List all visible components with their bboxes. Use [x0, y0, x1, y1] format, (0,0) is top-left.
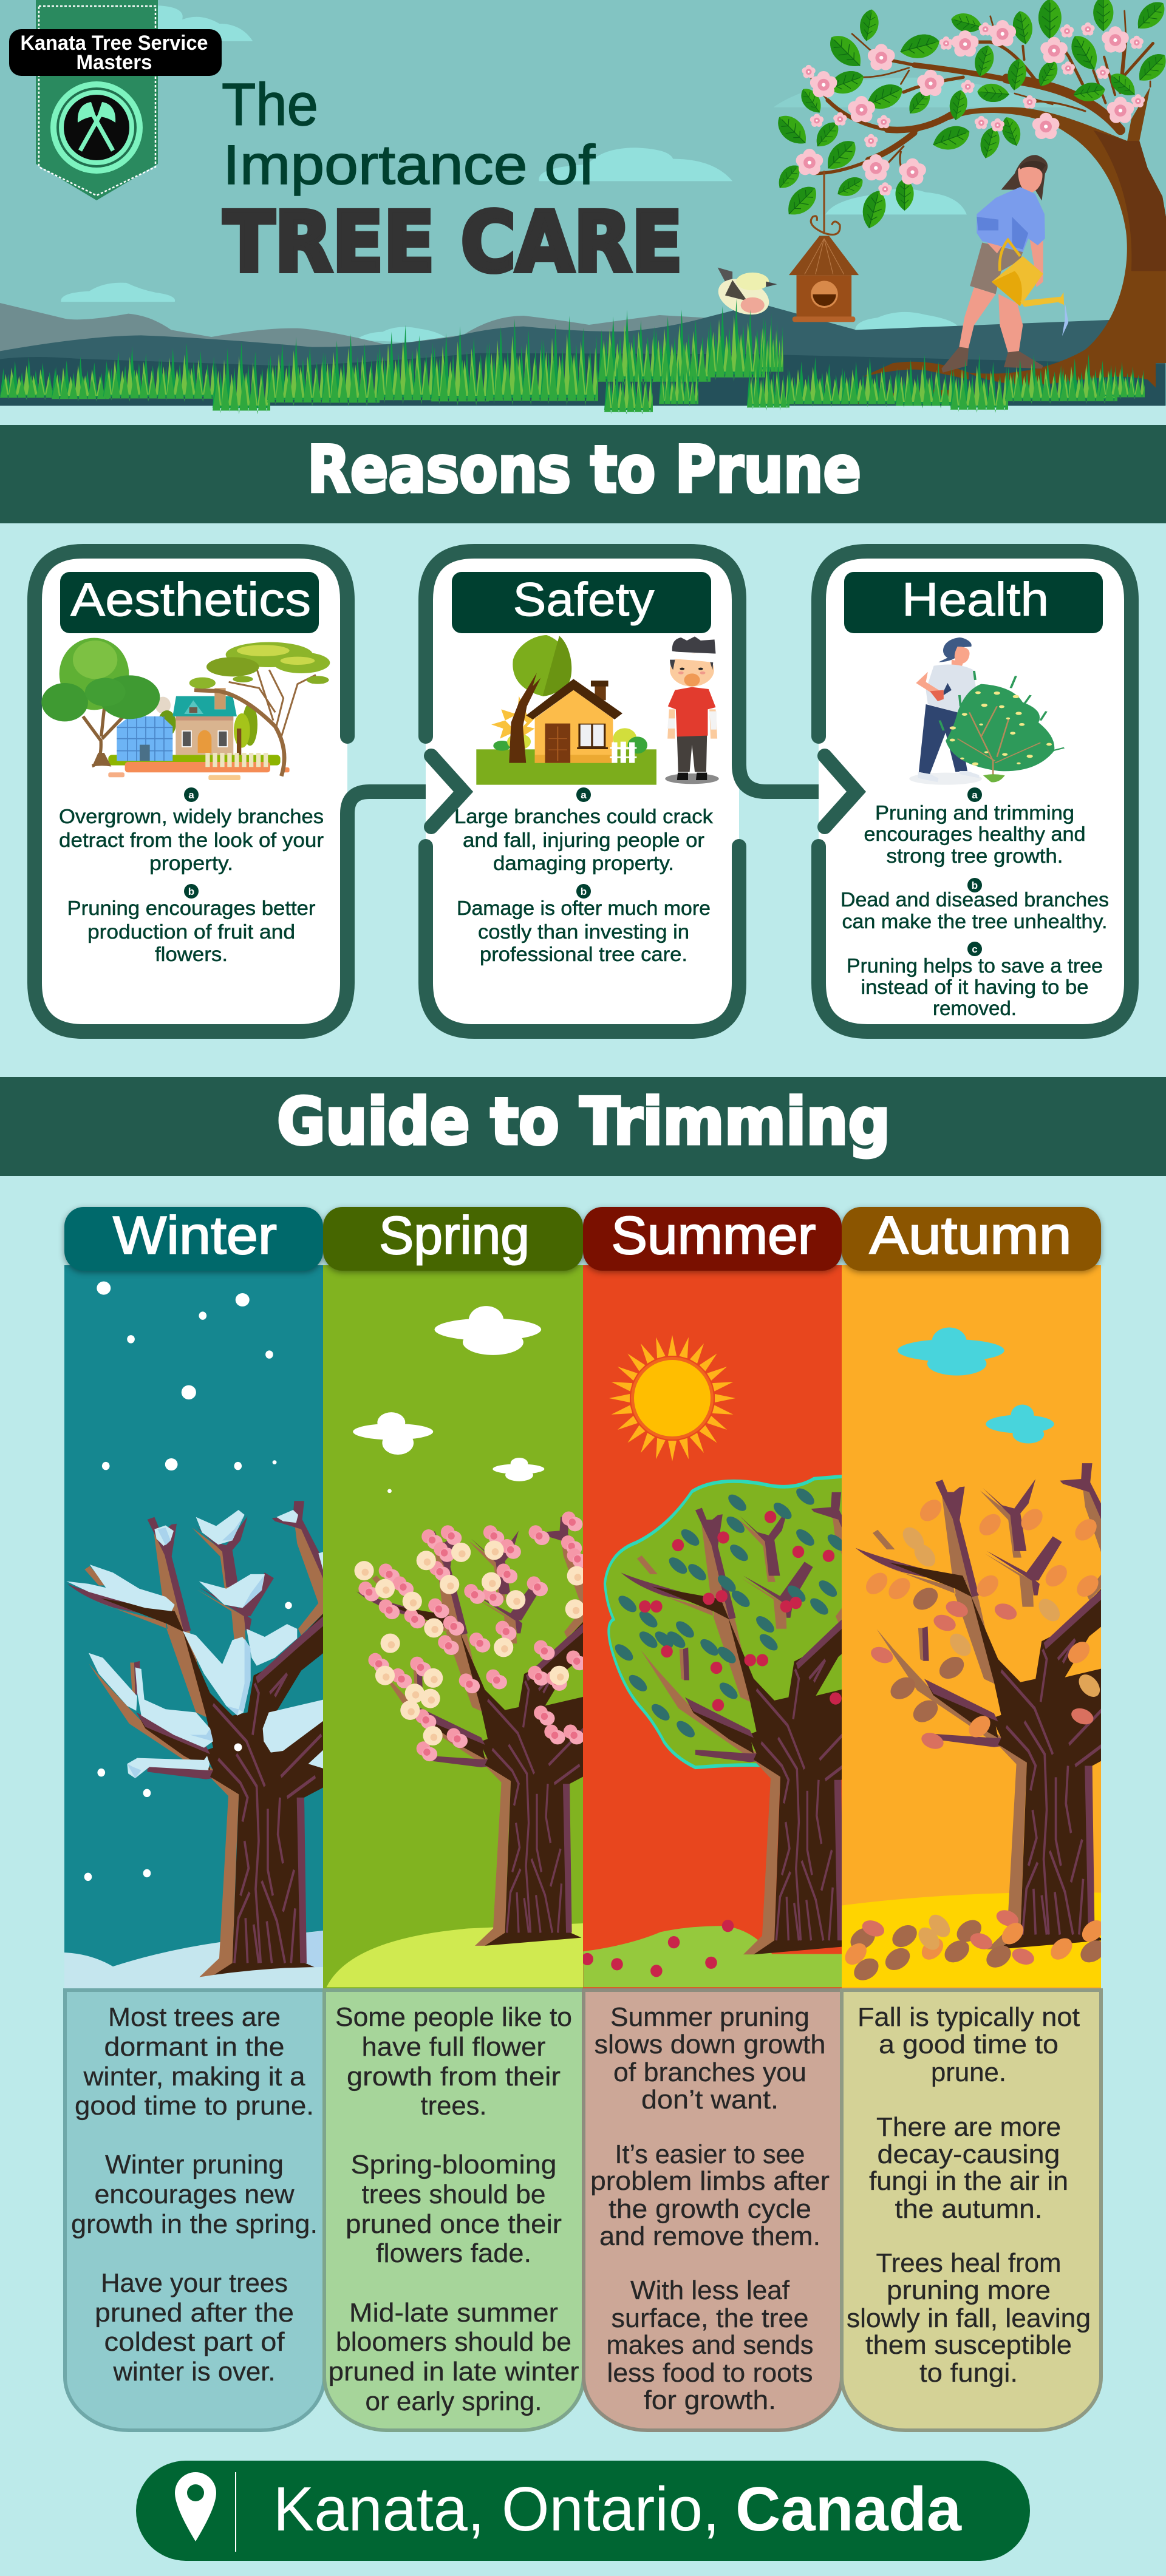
heading: Aesthetics: Aesthetics	[70, 573, 311, 626]
winter tree	[67, 1501, 326, 1977]
text panel: winter	[65, 1990, 324, 2430]
header hero illustration	[0, 0, 1166, 415]
section bar: Reasons to Prune: Reasons to Prune	[307, 432, 861, 507]
text panel: autumn: Trees heal from	[876, 2248, 1062, 2278]
bird	[718, 267, 777, 314]
text panel: summer: the growth cycle	[609, 2194, 811, 2224]
text panel: autumn: a good time to	[879, 2030, 1059, 2059]
text block: encourages healthy and	[864, 823, 1086, 845]
bullet b	[184, 884, 199, 899]
text panel: summer: makes and sends	[606, 2330, 814, 2360]
falling and fallen leaves	[843, 1496, 1106, 1984]
text panel: spring: bloomers should be	[336, 2327, 571, 2357]
clouds and ground	[842, 1327, 1101, 1987]
text panel: spring: trees.	[420, 2091, 487, 2121]
text panel: autumn: Fall is typically not	[857, 2002, 1080, 2032]
text block	[840, 888, 1109, 933]
text panel: summer: Summer pruning	[610, 2002, 810, 2032]
text panel: summer: slows down growth	[594, 2030, 826, 2059]
summer tree	[621, 1492, 861, 1954]
text panel: autumn: decay-causing	[877, 2139, 1060, 2169]
illustration: house and trees	[41, 638, 330, 780]
sun	[609, 1335, 735, 1461]
text block: can make the tree unhealthy.	[842, 910, 1108, 933]
bullet b: b	[972, 880, 978, 891]
location text: Kanata, Ontario,	[273, 2474, 720, 2544]
text block: and fall, injuring people or	[463, 829, 704, 851]
bullet a: a	[972, 789, 978, 801]
text block: detract from the look of your	[59, 829, 324, 851]
company name label: Masters	[77, 51, 152, 74]
panel: Health	[819, 551, 1131, 1031]
company name label: Kanata Tree Service	[21, 32, 208, 55]
arrow: safety to health	[825, 756, 856, 827]
header: Spring: Spring	[379, 1205, 530, 1265]
text panel: spring: flowers fade.	[376, 2238, 531, 2268]
text panel: summer: don’t want.	[641, 2085, 779, 2115]
section bar: Guide to Trimming: Guide to Trimming	[277, 1084, 890, 1159]
text panel: autumn: There are more	[876, 2112, 1061, 2142]
text block: Large branches could crack	[454, 805, 714, 828]
title	[222, 71, 683, 291]
panel: Safety	[426, 551, 856, 1031]
text panel: winter: Most trees are	[108, 2002, 281, 2032]
text panel: summer: of branches you	[613, 2058, 806, 2087]
text panel: autumn: slowly in fall, leaving	[847, 2303, 1091, 2333]
heading: Health	[844, 572, 1103, 633]
panel: spring scene	[323, 1265, 589, 1988]
text panel: summer: for growth.	[644, 2385, 776, 2415]
text panel: autumn: prune.	[931, 2058, 1006, 2087]
text panel: winter: dormant in the	[104, 2032, 284, 2062]
text panel: spring: or early spring.	[366, 2387, 542, 2416]
location text bold: Canada	[735, 2474, 962, 2544]
text block: costly than investing in	[478, 920, 689, 943]
text block	[59, 805, 324, 874]
text panel: winter: winter is over.	[113, 2357, 275, 2387]
text panel: winter: Have your trees	[101, 2268, 288, 2298]
text panel: autumn: the autumn.	[895, 2194, 1042, 2224]
text block: production of fruit and	[87, 920, 295, 943]
illustration: fallen tree on house and injured man	[476, 635, 719, 785]
title: TREE CARE	[223, 195, 683, 291]
text block	[454, 805, 714, 874]
heading: Safety: Safety	[513, 573, 655, 626]
illustration: woman pruning a bush	[909, 637, 1064, 785]
front snow	[199, 1967, 323, 1979]
text panel: spring: Some people like to	[335, 2002, 572, 2032]
bullet a	[576, 787, 591, 802]
bullet b: b	[581, 886, 587, 897]
text panel: autumn	[842, 1990, 1101, 2430]
text block	[864, 801, 1086, 867]
heading: Health: Health	[902, 573, 1049, 626]
axes medallion	[50, 81, 143, 174]
title: Importance of	[223, 134, 595, 196]
text block: Pruning encourages better	[67, 897, 316, 919]
bullet b	[576, 884, 591, 899]
large blossom tree	[772, 0, 1166, 404]
panel: Aesthetics	[35, 551, 465, 1031]
text panel: winter: coldest part of	[104, 2327, 285, 2357]
text panel: autumn: fungi in the air in	[869, 2166, 1068, 2196]
panel: autumn scene	[842, 1265, 1114, 1988]
spring tree	[356, 1517, 589, 1946]
text panel: autumn: pruning more	[887, 2275, 1051, 2305]
text panel: summer	[584, 1990, 842, 2430]
text panel: summer: It’s easier to see	[615, 2139, 805, 2169]
header: Spring	[323, 1205, 583, 1271]
text block: Pruning and trimming	[875, 801, 1074, 824]
company name label	[9, 29, 222, 76]
title: The	[222, 71, 318, 138]
text panel: summer: With less leaf	[630, 2275, 790, 2305]
header: Autumn: Autumn	[870, 1205, 1071, 1265]
clouds	[61, 5, 1071, 330]
bullet c	[967, 942, 982, 956]
panel: winter scene	[64, 1265, 326, 1988]
bullet a	[967, 787, 982, 802]
text panel: summer: surface, the tree	[611, 2303, 809, 2333]
snowflakes	[84, 1282, 292, 1881]
text panel: spring: pruned in late winter	[328, 2357, 579, 2387]
text block: Overgrown, widely branches	[59, 805, 324, 828]
text panel: winter: pruned after the	[95, 2298, 294, 2328]
clouds and hill	[327, 1306, 583, 1987]
header: Summer: Summer	[611, 1205, 816, 1265]
blossoms	[354, 1511, 588, 1761]
mountains	[0, 303, 1165, 406]
text panel: summer: problem limbs after	[590, 2166, 830, 2196]
snowy ground back	[64, 1931, 323, 1988]
bullet a	[184, 787, 199, 802]
ground and crown	[583, 1476, 845, 1987]
text panel: spring: Spring-blooming	[351, 2150, 556, 2180]
arrow: aesthetics to safety	[431, 756, 463, 827]
season headers	[64, 1205, 1101, 1271]
text block: property.	[149, 852, 233, 874]
header: Winter	[64, 1205, 323, 1271]
text block: Dead and diseased branches	[840, 888, 1109, 911]
gardener woman with watering can	[941, 155, 1068, 373]
snow on branches	[66, 1510, 324, 1778]
text panel: summer: less food to roots	[607, 2358, 813, 2388]
text panel: winter: Winter pruning	[105, 2150, 284, 2180]
bullet b	[967, 878, 982, 892]
text block: damaging property.	[493, 852, 674, 874]
panel: summer scene	[581, 1265, 861, 1988]
header: Winter: Winter	[113, 1205, 277, 1265]
text panel: winter: good time to prune.	[75, 2091, 314, 2121]
tree leaves	[772, 0, 1166, 231]
text block: removed.	[933, 997, 1017, 1019]
bullet c: c	[972, 943, 978, 955]
text panel: winter: winter, making it a	[83, 2062, 305, 2092]
text block: strong tree growth.	[887, 845, 1063, 867]
text panel: winter: encourages new	[95, 2180, 295, 2209]
leaves and cherries	[581, 1485, 847, 1977]
grass	[0, 299, 1145, 415]
text panel: spring: pruned once their	[346, 2209, 562, 2239]
section bar: Reasons to Prune	[0, 425, 1166, 523]
text panel: spring: have full flower	[362, 2032, 545, 2062]
text block: instead of it having to be	[861, 976, 1088, 998]
ribbon badge	[9, 0, 222, 200]
text panel: spring: growth from their	[347, 2062, 561, 2092]
header: Autumn	[842, 1205, 1101, 1271]
section bar: Guide to Trimming	[0, 1077, 1166, 1176]
birdhouse	[789, 171, 859, 322]
autumn tree	[856, 1463, 1114, 1949]
text panel: autumn: them susceptible	[865, 2330, 1072, 2360]
text panel: autumn: to fungi.	[919, 2358, 1018, 2388]
tree blossoms	[796, 20, 1145, 195]
text block	[457, 897, 711, 965]
text panel: summer: and remove them.	[599, 2221, 820, 2251]
bullet a: a	[188, 789, 194, 801]
icon: location pin	[175, 2472, 216, 2541]
footer location pill	[136, 2461, 1030, 2561]
text block	[847, 954, 1103, 1019]
bullet b: b	[188, 886, 194, 897]
text block: Damage is ofter much more	[457, 897, 711, 919]
text block: professional tree care.	[480, 943, 687, 965]
text panel: spring: Mid-late summer	[349, 2298, 558, 2328]
text block: Pruning helps to save a tree	[847, 954, 1103, 977]
heading: Safety	[452, 572, 711, 633]
text block	[67, 897, 316, 965]
bullet a: a	[581, 789, 587, 801]
text block: flowers.	[155, 943, 228, 965]
text panel: spring	[324, 1990, 584, 2430]
text panel: spring: trees should be	[362, 2180, 545, 2209]
text panel: winter: growth in the spring.	[71, 2209, 318, 2239]
